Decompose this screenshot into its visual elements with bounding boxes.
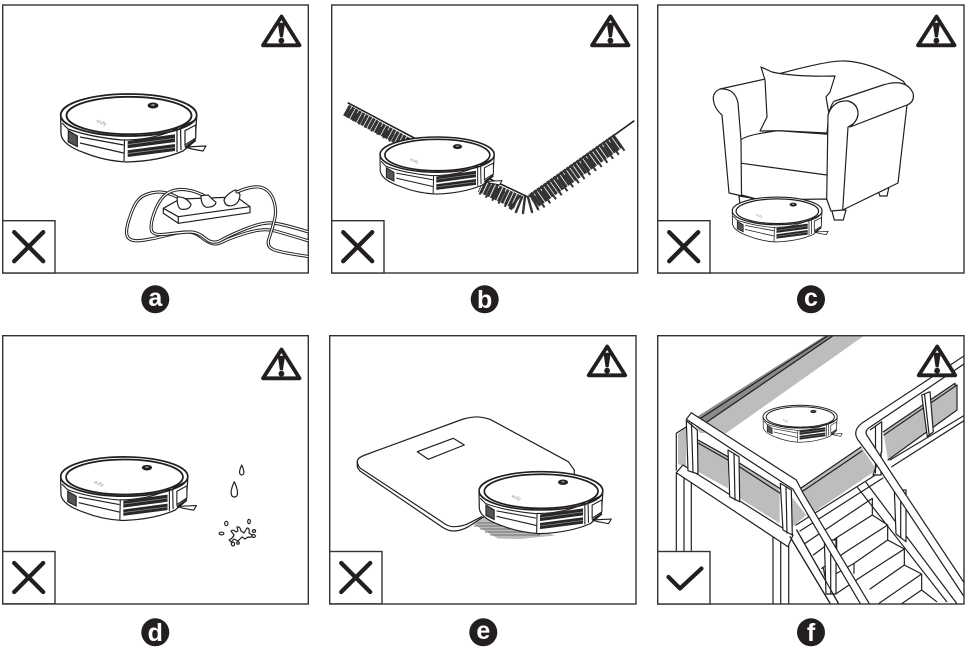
lower right rail: [796, 415, 965, 531]
label f: [797, 618, 825, 647]
illustration: robot vacuum: [380, 137, 502, 194]
illustration: robot vacuum: eufy: [95, 118, 108, 128]
stairs: [790, 482, 957, 612]
icon: warning triangle: [263, 350, 300, 378]
icon: check mark: [658, 552, 710, 604]
icon: warning triangle: [919, 346, 955, 375]
illustration: robot vacuum: eufy: [409, 157, 420, 165]
label d: d: [148, 619, 163, 647]
label a: a: [148, 284, 163, 312]
illustration: robot vacuum: [61, 94, 206, 162]
illustration: armchair with pillow: [713, 61, 913, 220]
illustration: rug fringe: [346, 103, 634, 213]
illustration: robot vacuum: eufy: [511, 494, 522, 503]
icon: warning triangle: [263, 16, 300, 45]
label a: [141, 284, 169, 313]
illustration: robot vacuum: [732, 197, 828, 242]
icon: cross: [3, 221, 55, 273]
lower left rail and legs: [676, 465, 838, 604]
illustration: robot vacuum: [763, 405, 842, 442]
label c: c: [804, 284, 818, 312]
label d: [141, 618, 169, 647]
label b: [471, 285, 499, 314]
back strip of the landing: [695, 336, 864, 433]
stair posts: [824, 392, 933, 594]
icon: cross: [658, 221, 710, 273]
icon: cross: [330, 552, 382, 604]
icon: cross: [332, 221, 384, 273]
left stair rail: [686, 413, 871, 606]
label f: f: [807, 619, 816, 647]
left posts: [686, 421, 792, 535]
illustration: robot vacuum: [479, 472, 611, 534]
illustration: shadow under robot: [473, 516, 555, 539]
illustration: robot vacuum: eufy: [755, 213, 763, 219]
illustration: landing, railing and stairs: [676, 336, 970, 612]
illustration: water drops and splash: [219, 465, 256, 546]
panel f: robot on landing with guard rails: [658, 336, 970, 612]
icon: warning triangle: [589, 346, 625, 375]
illustration: bathroom scale: [357, 417, 574, 531]
illustration: robot vacuum: [61, 457, 197, 520]
label e: e: [476, 617, 490, 645]
icon: tangled power cords and strip: [127, 187, 312, 257]
panel c: robot under armchair: [658, 5, 964, 273]
icon: cross: [3, 552, 55, 604]
panel d: robot near liquid: [3, 336, 308, 604]
panel e: robot on scale: [330, 336, 636, 604]
label c: [797, 284, 825, 313]
panel a: robot near power strip and cords: [3, 5, 312, 273]
panel b: robot on rug fringe: [332, 5, 638, 273]
label e: [469, 617, 497, 646]
icon: warning triangle: [592, 16, 628, 45]
right stair rail: [856, 352, 970, 598]
illustration: robot vacuum: eufy: [782, 418, 789, 424]
grey panels behind railing: [676, 383, 957, 528]
icon: warning triangle: [918, 16, 954, 45]
illustration: robot vacuum: eufy: [93, 479, 105, 489]
label b: b: [477, 286, 492, 314]
